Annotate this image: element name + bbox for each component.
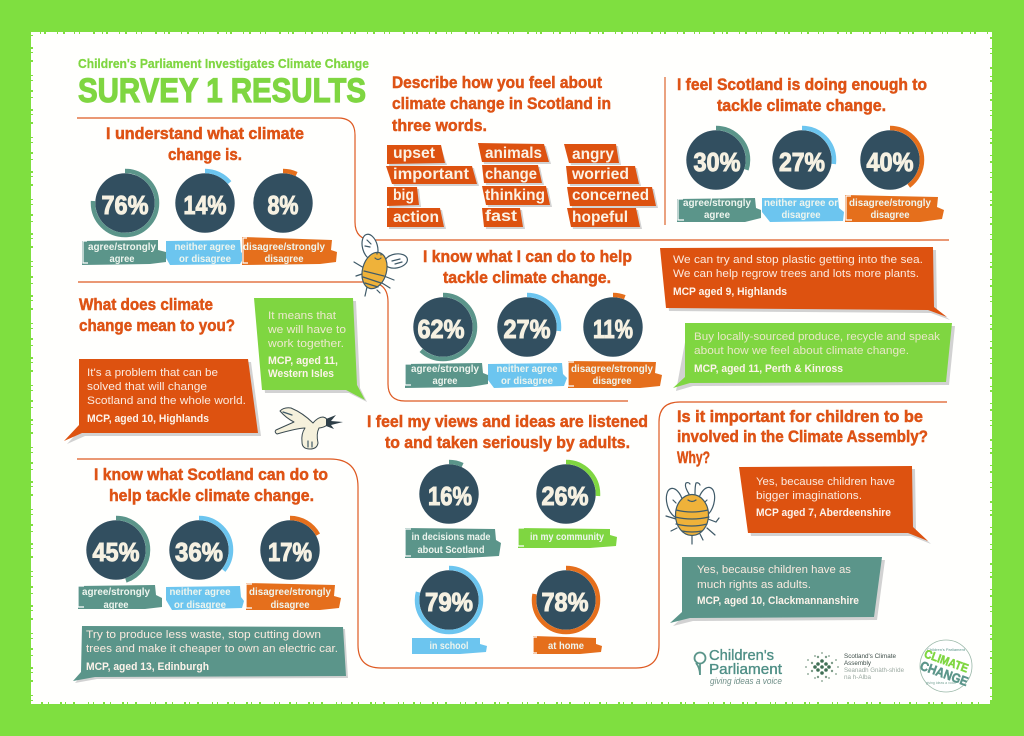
- label: disagree: [568, 361, 662, 388]
- title: [78, 57, 369, 110]
- logo: Children's Parliament: [694, 647, 783, 686]
- logo: Scotland's Climate Assembly: na h-Alba: [844, 674, 871, 681]
- label: neither: [166, 586, 244, 611]
- logo: Scotland's Climate Assembly: [805, 652, 904, 682]
- words column 1: important: [393, 166, 470, 183]
- donut: 11%: 11%: [593, 316, 633, 344]
- label: neither: or disagree: [179, 254, 231, 265]
- donut: 40%: [858, 128, 922, 192]
- callout: plastic in the sea: We can help regrow trees and lots more plants.: [673, 268, 919, 280]
- donut: 11%: [581, 295, 645, 359]
- panel: I know what I can do: [405, 247, 662, 388]
- callout: buy locally sourced: [673, 323, 955, 391]
- heading: help tackle climate change.: [109, 486, 314, 505]
- heading: tackle climate change.: [443, 268, 611, 287]
- logo: Scotland's Climate Assembly: Seanadh Gnàth-shìde: [844, 667, 904, 674]
- logo: Scotland's Climate Assembly: Scotland's Climate: [844, 653, 896, 660]
- donut: 76%: 76%: [102, 192, 148, 220]
- donut: 26%: 26%: [542, 483, 588, 511]
- label: neither: [762, 198, 844, 222]
- donut: 76%: [93, 171, 157, 235]
- donut: 30%: [684, 128, 748, 192]
- words column 3: concerned: [572, 187, 649, 204]
- label: agree: agree/strongly: [82, 587, 150, 598]
- label: agree: agree: [432, 376, 458, 387]
- callout: plastic in the sea: MCP aged 9, Highlands: [673, 286, 787, 298]
- donut: 27%: [770, 128, 834, 192]
- heading: Describe how you feel about: [392, 73, 602, 92]
- callout: green speech bubble: work together.: [267, 338, 344, 350]
- title: SURVEY 1 RESULTS: [78, 72, 366, 110]
- callout: as much rights: [670, 557, 885, 626]
- callout: buy locally sourced: Buy locally-sourced produce, recycle and speak: [694, 331, 940, 343]
- title: Children's Parliament Investigates Climate Change: [78, 57, 369, 71]
- panel: I know what Scotland can do: [73, 465, 348, 683]
- donut: 79%: 79%: [425, 589, 473, 617]
- callout: bigger imaginations: Yes, because children have: [756, 476, 895, 488]
- donut: 8%: [251, 171, 315, 235]
- callout: orange speech bubble: [64, 359, 261, 444]
- donut: 27%: 27%: [779, 149, 825, 177]
- callout: buy locally sourced: MCP, aged 11, Perth & Kinross: [694, 363, 843, 375]
- heading: I know what Scotland can do to: [94, 465, 328, 484]
- donut: 45%: 45%: [92, 539, 140, 567]
- callout: plastic in the sea: We can try and stop plastic getting into the sea.: [673, 254, 923, 266]
- heading: [367, 412, 648, 452]
- words column 3: worried: [571, 166, 629, 183]
- donut: 78%: [534, 568, 598, 632]
- logo: Climate Change badge: Children's Parliament: [927, 647, 966, 652]
- label: in school: in school: [430, 641, 469, 652]
- heading: to and taken seriously by adults.: [385, 433, 630, 452]
- label: at home: at home: [548, 641, 584, 652]
- panel: I feel my views and ideas are listened to: [367, 412, 648, 654]
- heading: [94, 465, 328, 505]
- icon: seagull: [275, 408, 343, 449]
- label: disagree: [246, 583, 341, 611]
- words column 2: change: [485, 166, 537, 183]
- panel: Is it important for children: [663, 407, 931, 626]
- label: agree: agree: [704, 210, 730, 221]
- label: disagree: disagree: [264, 254, 304, 265]
- logo: Climate Change badge: [918, 640, 972, 692]
- label: neither: [488, 363, 567, 388]
- heading: [79, 295, 235, 335]
- label: at home: [533, 636, 602, 654]
- label: neither: neither agree: [174, 242, 236, 253]
- donut: 14%: 14%: [184, 192, 226, 220]
- donut: 8%: 8%: [268, 192, 298, 220]
- donut: 16%: [417, 462, 481, 526]
- logo: Climate Change badge: CLIMATE: [922, 647, 970, 676]
- donut: 26%: [534, 462, 598, 526]
- words column 3: [564, 144, 656, 227]
- heading: Is it important for children to be: [677, 407, 923, 426]
- label: in my community: [518, 528, 617, 548]
- label: neither: or disagree: [501, 376, 553, 387]
- label: in my community: in my community: [530, 532, 604, 543]
- words column 2: [478, 143, 550, 227]
- logo: Climate Change badge: giving ideas a voice: [926, 681, 956, 685]
- logo: Scotland's Climate Assembly: Assembly: [844, 660, 872, 667]
- donut: 62%: [411, 295, 475, 359]
- callout: green speech bubble: Western Isles: [268, 368, 334, 380]
- label: agree: agree/strongly: [411, 364, 479, 375]
- label: agree: [82, 240, 166, 265]
- donut: 16%: 16%: [428, 483, 472, 511]
- label: agree: [405, 363, 488, 388]
- panel: I understand what climate change is: [82, 124, 337, 265]
- donut: 14%: [173, 171, 237, 235]
- callout: as much rights: much rights as adults.: [697, 579, 811, 591]
- words column 1: [386, 145, 477, 227]
- donut: 79%: [417, 568, 481, 632]
- panel: I feel Scotland is doing enough: [677, 75, 944, 222]
- label: disagree: disagree: [870, 210, 910, 221]
- label: neither: or disagree: [174, 600, 226, 611]
- heading: I feel Scotland is doing enough to: [677, 75, 927, 94]
- icon: smiling bug: [663, 483, 719, 544]
- heading: change mean to you?: [79, 316, 235, 335]
- label: in school: [412, 638, 487, 654]
- label: disagree: [242, 237, 337, 265]
- heading: tackle climate change.: [717, 96, 886, 115]
- words column 2: animals: [485, 145, 542, 162]
- callout: bigger imaginations: MCP aged 7, Aberdeenshire: [756, 507, 891, 519]
- label: neither: neither agree: [496, 364, 558, 375]
- label: agree: agree/strongly: [88, 242, 156, 253]
- donut: 62%: 62%: [418, 316, 464, 344]
- callout: orange speech bubble: It's a problem that can be: [87, 367, 218, 379]
- donut: 45%: [84, 518, 148, 582]
- label: neither: neither agree or: [764, 198, 838, 209]
- donut: 36%: 36%: [175, 539, 223, 567]
- label: neither: [166, 240, 245, 265]
- words column 1: big: [393, 187, 414, 204]
- heading: What does climate: [79, 295, 213, 314]
- heading: [106, 124, 304, 164]
- label: agree: agree/strongly: [683, 198, 751, 209]
- label: agree: agree: [104, 600, 129, 611]
- words column 3: hopeful: [572, 209, 628, 226]
- label: disagree: disagree: [592, 376, 632, 387]
- heading: [677, 407, 928, 467]
- heading: Why?: [677, 448, 710, 467]
- label: disagree: disagree/strongly: [571, 364, 653, 375]
- words column 2: thinking: [485, 187, 545, 204]
- donut: 27%: [495, 295, 559, 359]
- word shadows: [388, 145, 658, 229]
- heading: [423, 247, 632, 287]
- label: in decisions made about Scotland: in decisions made: [412, 532, 491, 543]
- callout: orange speech bubble: Scotland and the whole world.: [87, 395, 246, 407]
- panel: describe in three words: [386, 73, 658, 229]
- label: neither: disagree: [782, 210, 821, 221]
- words column 1: upset: [393, 145, 436, 162]
- label: disagree: disagree/strongly: [243, 242, 325, 253]
- heading: I understand what climate: [106, 124, 304, 143]
- callout: green speech bubble: MCP, aged 11,: [268, 355, 338, 367]
- donut: 78%: 78%: [542, 589, 588, 617]
- label: agree: agree: [110, 254, 135, 265]
- label: disagree: disagree: [270, 600, 310, 611]
- icon: beetle on line: [354, 233, 409, 296]
- heading: involved in the Climate Assembly?: [677, 427, 928, 446]
- donut: 17%: 17%: [268, 539, 312, 567]
- label: in decisions made about Scotland: [405, 528, 501, 558]
- label: in decisions made about Scotland: about Scotland: [418, 545, 484, 556]
- callout: plastic in the sea: [660, 247, 950, 320]
- words column 2: fast: [485, 208, 518, 225]
- callout: less waste: MCP, aged 13, Edinburgh: [86, 661, 209, 673]
- logo: Children's Parliament: giving ideas a voice: [710, 676, 782, 686]
- callout: green speech bubble: we will have to: [267, 324, 346, 336]
- callout: less waste: Try to produce less waste, stop cutting down: [86, 629, 321, 641]
- heading: [677, 75, 927, 115]
- label: neither: neither agree: [170, 587, 231, 598]
- logo: Climate Change badge: CHANGE: [918, 658, 970, 689]
- callout: less waste: trees and make it cheaper to own an electric car.: [86, 643, 338, 655]
- panel: What does climate change mean to you: [64, 295, 367, 449]
- callout: green speech bubble: [254, 298, 367, 402]
- donut: 27%: 27%: [504, 316, 550, 344]
- callout: as much rights: MCP, aged 10, Clackmannanshire: [697, 595, 859, 607]
- label: disagree: disagree/strongly: [249, 587, 331, 598]
- heading: I feel my views and ideas are listened: [367, 412, 648, 431]
- words column 3: angry: [572, 146, 614, 163]
- callout: as much rights: Yes, because children have as: [697, 564, 851, 576]
- heading: [392, 73, 611, 135]
- words column 1: action: [393, 209, 439, 226]
- logo: Children's Parliament: Children's: [709, 647, 774, 664]
- label: agree: [677, 198, 761, 222]
- callout: bigger imaginations: bigger imaginations.: [756, 490, 862, 502]
- heading: climate change in Scotland in: [392, 94, 611, 113]
- donut: 40%: 40%: [866, 149, 914, 177]
- callout: less waste: [73, 626, 348, 683]
- callout: green speech bubble: It means that: [268, 310, 337, 322]
- donut: 17%: [258, 518, 322, 582]
- heading: three words.: [392, 116, 487, 135]
- donut: 36%: [167, 518, 231, 582]
- callout: buy locally sourced: about how we feel about climate change.: [694, 345, 909, 357]
- label: disagree: disagree/strongly: [849, 198, 931, 209]
- callout: orange speech bubble: solved that will change: [87, 381, 207, 393]
- donut: 30%: 30%: [694, 149, 740, 177]
- callout: bigger imaginations: [739, 466, 931, 544]
- callout: orange speech bubble: MCP, aged 10, Highlands: [87, 413, 209, 425]
- heading: I know what I can do to help: [423, 247, 632, 266]
- label: agree: [78, 585, 162, 611]
- heading: change is.: [168, 145, 242, 164]
- logo: Children's Parliament: Parliament: [709, 661, 783, 678]
- label: disagree: [845, 195, 944, 222]
